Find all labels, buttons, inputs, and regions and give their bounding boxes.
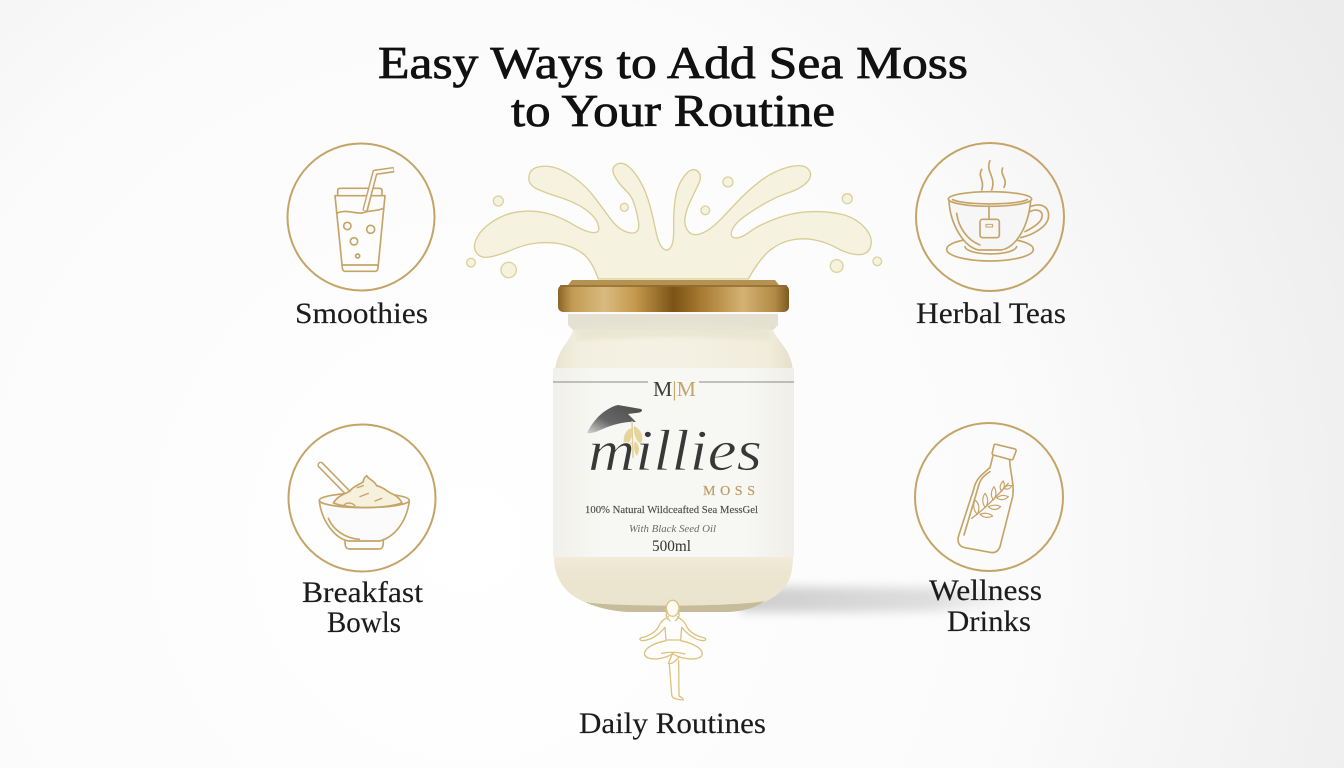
product variant: With Black Seed Oil (629, 523, 716, 535)
panel: smoothies (288, 144, 434, 330)
droplets (467, 177, 882, 278)
title (378, 37, 968, 136)
icon: smoothie glass (288, 144, 434, 290)
icon: hand and leaf (587, 405, 642, 458)
jar base (554, 557, 793, 612)
title: Easy Ways to Add Sea Moss (378, 37, 968, 88)
product size: 500ml (652, 538, 692, 555)
title: to Your Routine (511, 85, 835, 136)
panel: breakfast bowls (288, 424, 436, 639)
brand name: millies (588, 418, 762, 483)
lid (558, 280, 789, 312)
jar (553, 280, 794, 612)
product description: 100% Natural Wildceafted Sea MessGel (585, 504, 758, 516)
splash (467, 163, 882, 279)
label: wellness drinks (929, 574, 1042, 638)
label: herbal teas: Herbal Teas (916, 297, 1066, 330)
panel: daily routines (579, 600, 766, 740)
label: daily routines: Daily Routines (579, 707, 766, 740)
label: wellness drinks: Wellness (929, 574, 1042, 607)
label panel (553, 368, 794, 557)
label: breakfast bowls: Breakfast (302, 576, 424, 609)
label: smoothies: Smoothies (295, 297, 428, 330)
glass neck highlight (568, 314, 778, 330)
icon: tea cup (916, 143, 1064, 291)
brand monogram: M|M (653, 377, 696, 401)
icon: yoga figure (640, 600, 706, 700)
icon: bottle (915, 423, 1063, 571)
jar body (555, 314, 793, 560)
label: breakfast bowls (302, 576, 424, 639)
panel: herbal teas (916, 143, 1066, 330)
panel: wellness drinks (915, 423, 1063, 638)
icon: bowl (288, 424, 436, 572)
label: wellness drinks: Drinks (947, 605, 1031, 638)
shadow: jar (740, 586, 1040, 612)
label: breakfast bowls: Bowls (327, 606, 401, 639)
brand sub-name: MOSS (703, 484, 755, 499)
